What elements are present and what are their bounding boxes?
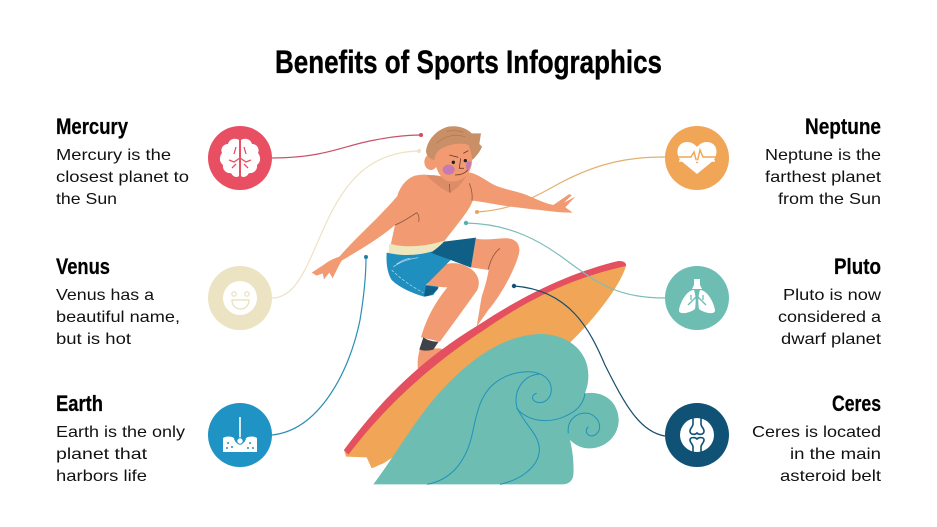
heading: Earth: Earth <box>56 391 103 416</box>
illustration: surfboard <box>344 261 626 468</box>
text block: Mercury: the Sun <box>56 191 117 208</box>
text block: Mercury: closest planet to <box>56 169 189 186</box>
connector: Mercury <box>272 133 423 158</box>
text block: Venus <box>56 287 180 348</box>
text block: Pluto: Pluto is now <box>783 287 882 304</box>
connector: Earth <box>272 255 368 435</box>
connector: Pluto <box>464 221 665 298</box>
heading: Ceres: Ceres <box>832 391 881 416</box>
text block: Earth: harbors life <box>56 468 147 485</box>
text block: Mercury <box>56 147 189 208</box>
text block: Pluto: considered a <box>778 309 881 326</box>
icon: bone joint <box>665 403 729 467</box>
text block: Earth: Earth is the only <box>56 424 185 441</box>
face <box>434 142 472 182</box>
connector: Ceres <box>512 284 665 436</box>
connector: Venus <box>272 149 421 298</box>
text block: Venus: Venus has a <box>56 287 154 304</box>
illustration: surfer upper body <box>312 126 575 297</box>
icon: brain <box>208 126 272 190</box>
text block: Neptune: from the Sun <box>778 191 881 208</box>
icon: smile <box>208 266 272 330</box>
text block: Ceres: Ceres is located <box>752 424 881 441</box>
text block: Neptune: farthest planet <box>765 169 882 186</box>
text block: Pluto <box>778 287 882 348</box>
icon: lungs <box>665 266 729 330</box>
text block: Ceres <box>752 424 882 485</box>
text block: Venus: beautiful name, <box>56 309 180 326</box>
illustration: wave <box>373 334 619 484</box>
text block: Earth <box>56 424 185 485</box>
text block: Neptune: Neptune is the <box>765 147 881 164</box>
icon: skin follicle <box>208 403 272 467</box>
connector: Neptune <box>475 157 665 214</box>
heading: Venus: Venus <box>56 254 110 279</box>
heading: Neptune: Neptune <box>805 114 881 139</box>
illustration: surfer legs <box>418 238 519 372</box>
heading: Pluto: Pluto <box>834 254 881 279</box>
ear <box>424 154 438 170</box>
title: Benefits of Sports Infographics <box>275 44 662 80</box>
icon: heart pulse <box>665 126 729 190</box>
text block: Earth: planet that <box>56 446 148 463</box>
heading: Mercury: Mercury <box>56 114 129 139</box>
shorts <box>388 241 445 255</box>
torso and arms <box>312 172 575 279</box>
text block: Venus: but is hot <box>56 331 132 348</box>
text block: Ceres: in the main <box>790 446 881 463</box>
text block: Mercury: Mercury is the <box>56 147 171 164</box>
text block: Neptune <box>765 147 882 208</box>
text block: Pluto: dwarf planet <box>781 331 882 348</box>
hair <box>426 126 482 160</box>
text block: Ceres: asteroid belt <box>780 468 882 485</box>
